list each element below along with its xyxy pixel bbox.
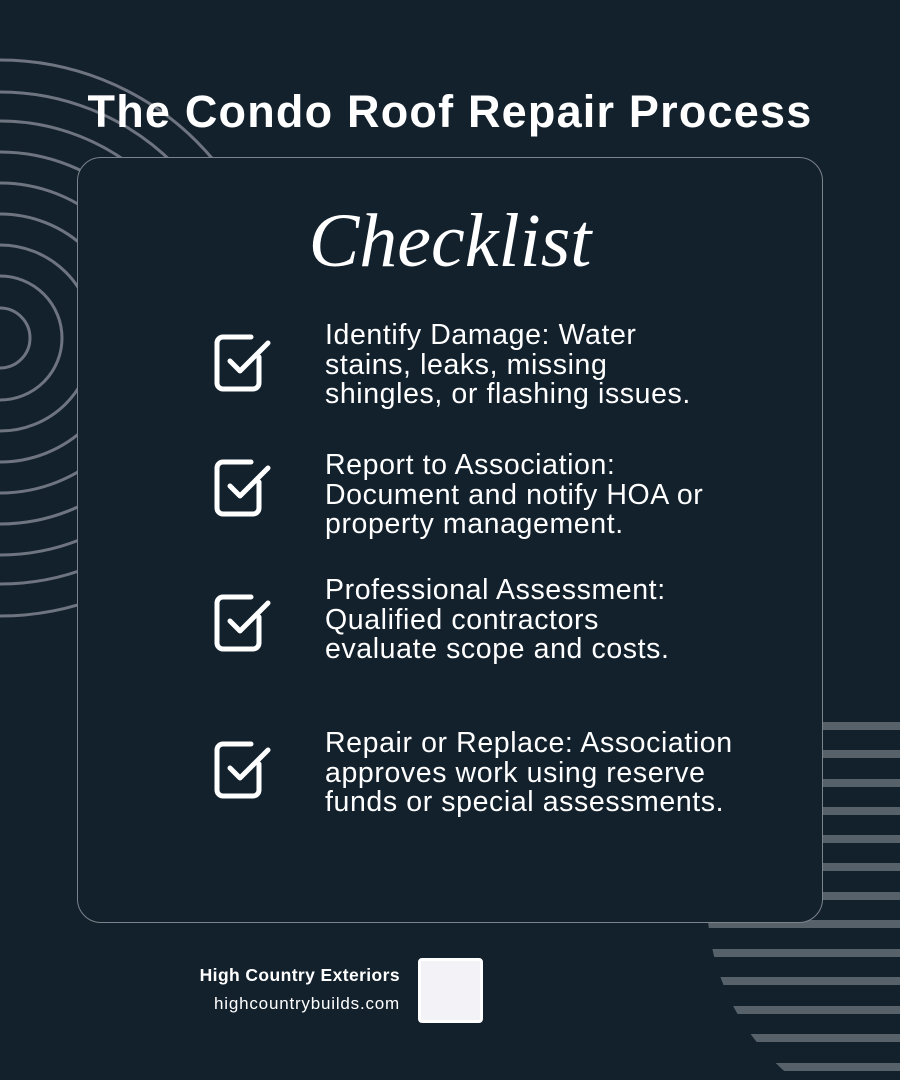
icon: checkbox 3 bbox=[214, 594, 270, 652]
text: item 3: evaluate scope and costs. bbox=[325, 633, 670, 665]
text: item 2: property management. bbox=[325, 508, 624, 540]
footer: brand text bbox=[200, 965, 400, 1013]
icon: checkbox 2 bbox=[214, 460, 270, 516]
text: item 2 bbox=[325, 449, 703, 540]
text: item 4: Repair or Replace: Association bbox=[325, 727, 733, 759]
footer: brand text: High Country Exteriors bbox=[200, 965, 400, 985]
text: item 2: Report to Association: bbox=[325, 449, 615, 481]
text: item 4: funds or special assessments. bbox=[325, 786, 724, 818]
title: The Condo Roof Repair Process bbox=[88, 86, 812, 137]
text: item 3: Qualified contractors bbox=[325, 604, 599, 636]
footer: brand text: highcountrybuilds.com bbox=[214, 994, 400, 1013]
text: item 4: approves work using reserve bbox=[325, 756, 706, 788]
text: item 2: Document and notify HOA or bbox=[325, 478, 703, 510]
text: item 3 bbox=[325, 574, 670, 665]
text: item 1: Identify Damage: Water bbox=[325, 319, 637, 351]
text: item 1: stains, leaks, missing bbox=[325, 348, 607, 380]
icon: checkbox 1 bbox=[214, 334, 270, 392]
text: item 1: shingles, or flashing issues. bbox=[325, 378, 691, 410]
footer: logo box bbox=[418, 958, 483, 1023]
panel: checklist card bbox=[77, 157, 823, 923]
text: item 4 bbox=[325, 727, 733, 818]
text: item 3: Professional Assessment: bbox=[325, 574, 666, 606]
heading: Checklist: Checklist bbox=[309, 199, 591, 283]
icon: checkbox 4 bbox=[214, 742, 270, 798]
text: item 1 bbox=[325, 319, 691, 410]
